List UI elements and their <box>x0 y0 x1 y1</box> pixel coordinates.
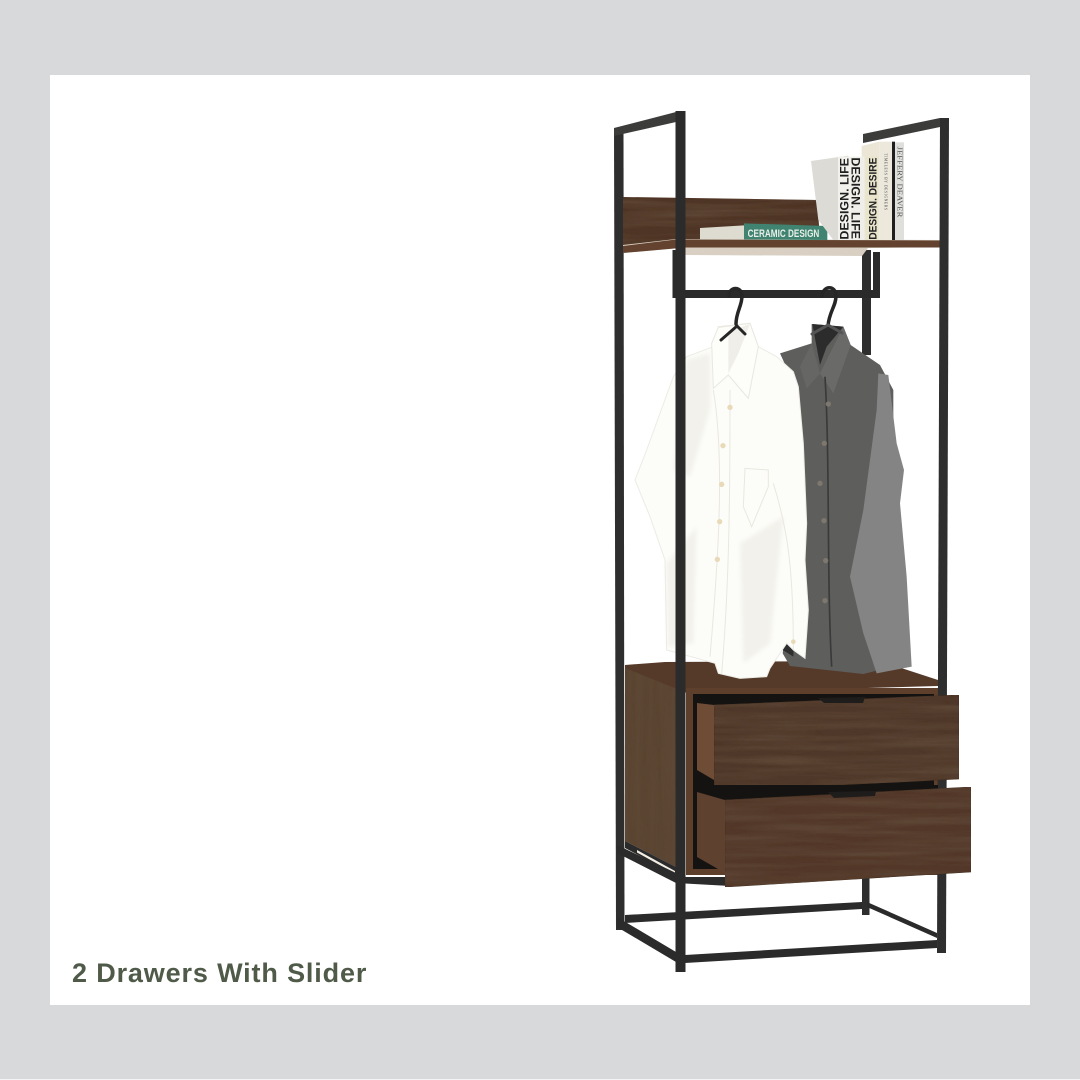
top frame bars <box>614 112 940 143</box>
book: Ceramic Design <box>700 223 827 240</box>
book: Design Life angled <box>811 156 852 240</box>
book: cream novel <box>879 142 895 240</box>
book: Jeffery Deaver <box>895 142 904 240</box>
books on shelf <box>700 142 904 240</box>
front left post <box>676 111 686 972</box>
white shirt <box>635 323 808 678</box>
book: Design Life angled: DESIGN. LIFE <box>838 158 852 240</box>
grey shirt <box>780 324 912 674</box>
book: Design Life upright: DESIGN. LIFE <box>848 157 862 239</box>
book: Design Desire <box>862 142 879 240</box>
cabinet front frame <box>686 688 938 875</box>
cabinet body <box>625 661 938 876</box>
lower rails and base frame <box>617 845 937 963</box>
right front post <box>937 118 949 953</box>
caption: 2 Drawers With Slider: 2 Drawers With Slider <box>72 958 367 988</box>
cabinet dark opening <box>693 694 934 869</box>
cabinet side panel <box>625 667 678 868</box>
rear frame posts <box>614 130 871 930</box>
panel: white background card <box>50 75 1030 1005</box>
shelf with backboard <box>623 197 942 256</box>
cabinet top <box>625 661 938 693</box>
upper drawer <box>697 695 959 791</box>
dark gap under side panel <box>625 841 678 876</box>
book: Jeffery Deaver: JEFFERY DEAVER <box>895 147 904 218</box>
book: Design Desire: DESIGN. DESIRE <box>867 157 879 240</box>
hanging rail with brackets <box>672 250 880 298</box>
light reflection strip <box>637 850 675 874</box>
book: Ceramic Design: CERAMIC DESIGN <box>748 228 819 240</box>
book: cream novel: TIMELESS BY DESIGNERS <box>883 153 887 210</box>
hangers <box>721 288 842 340</box>
lower drawer <box>693 785 971 887</box>
